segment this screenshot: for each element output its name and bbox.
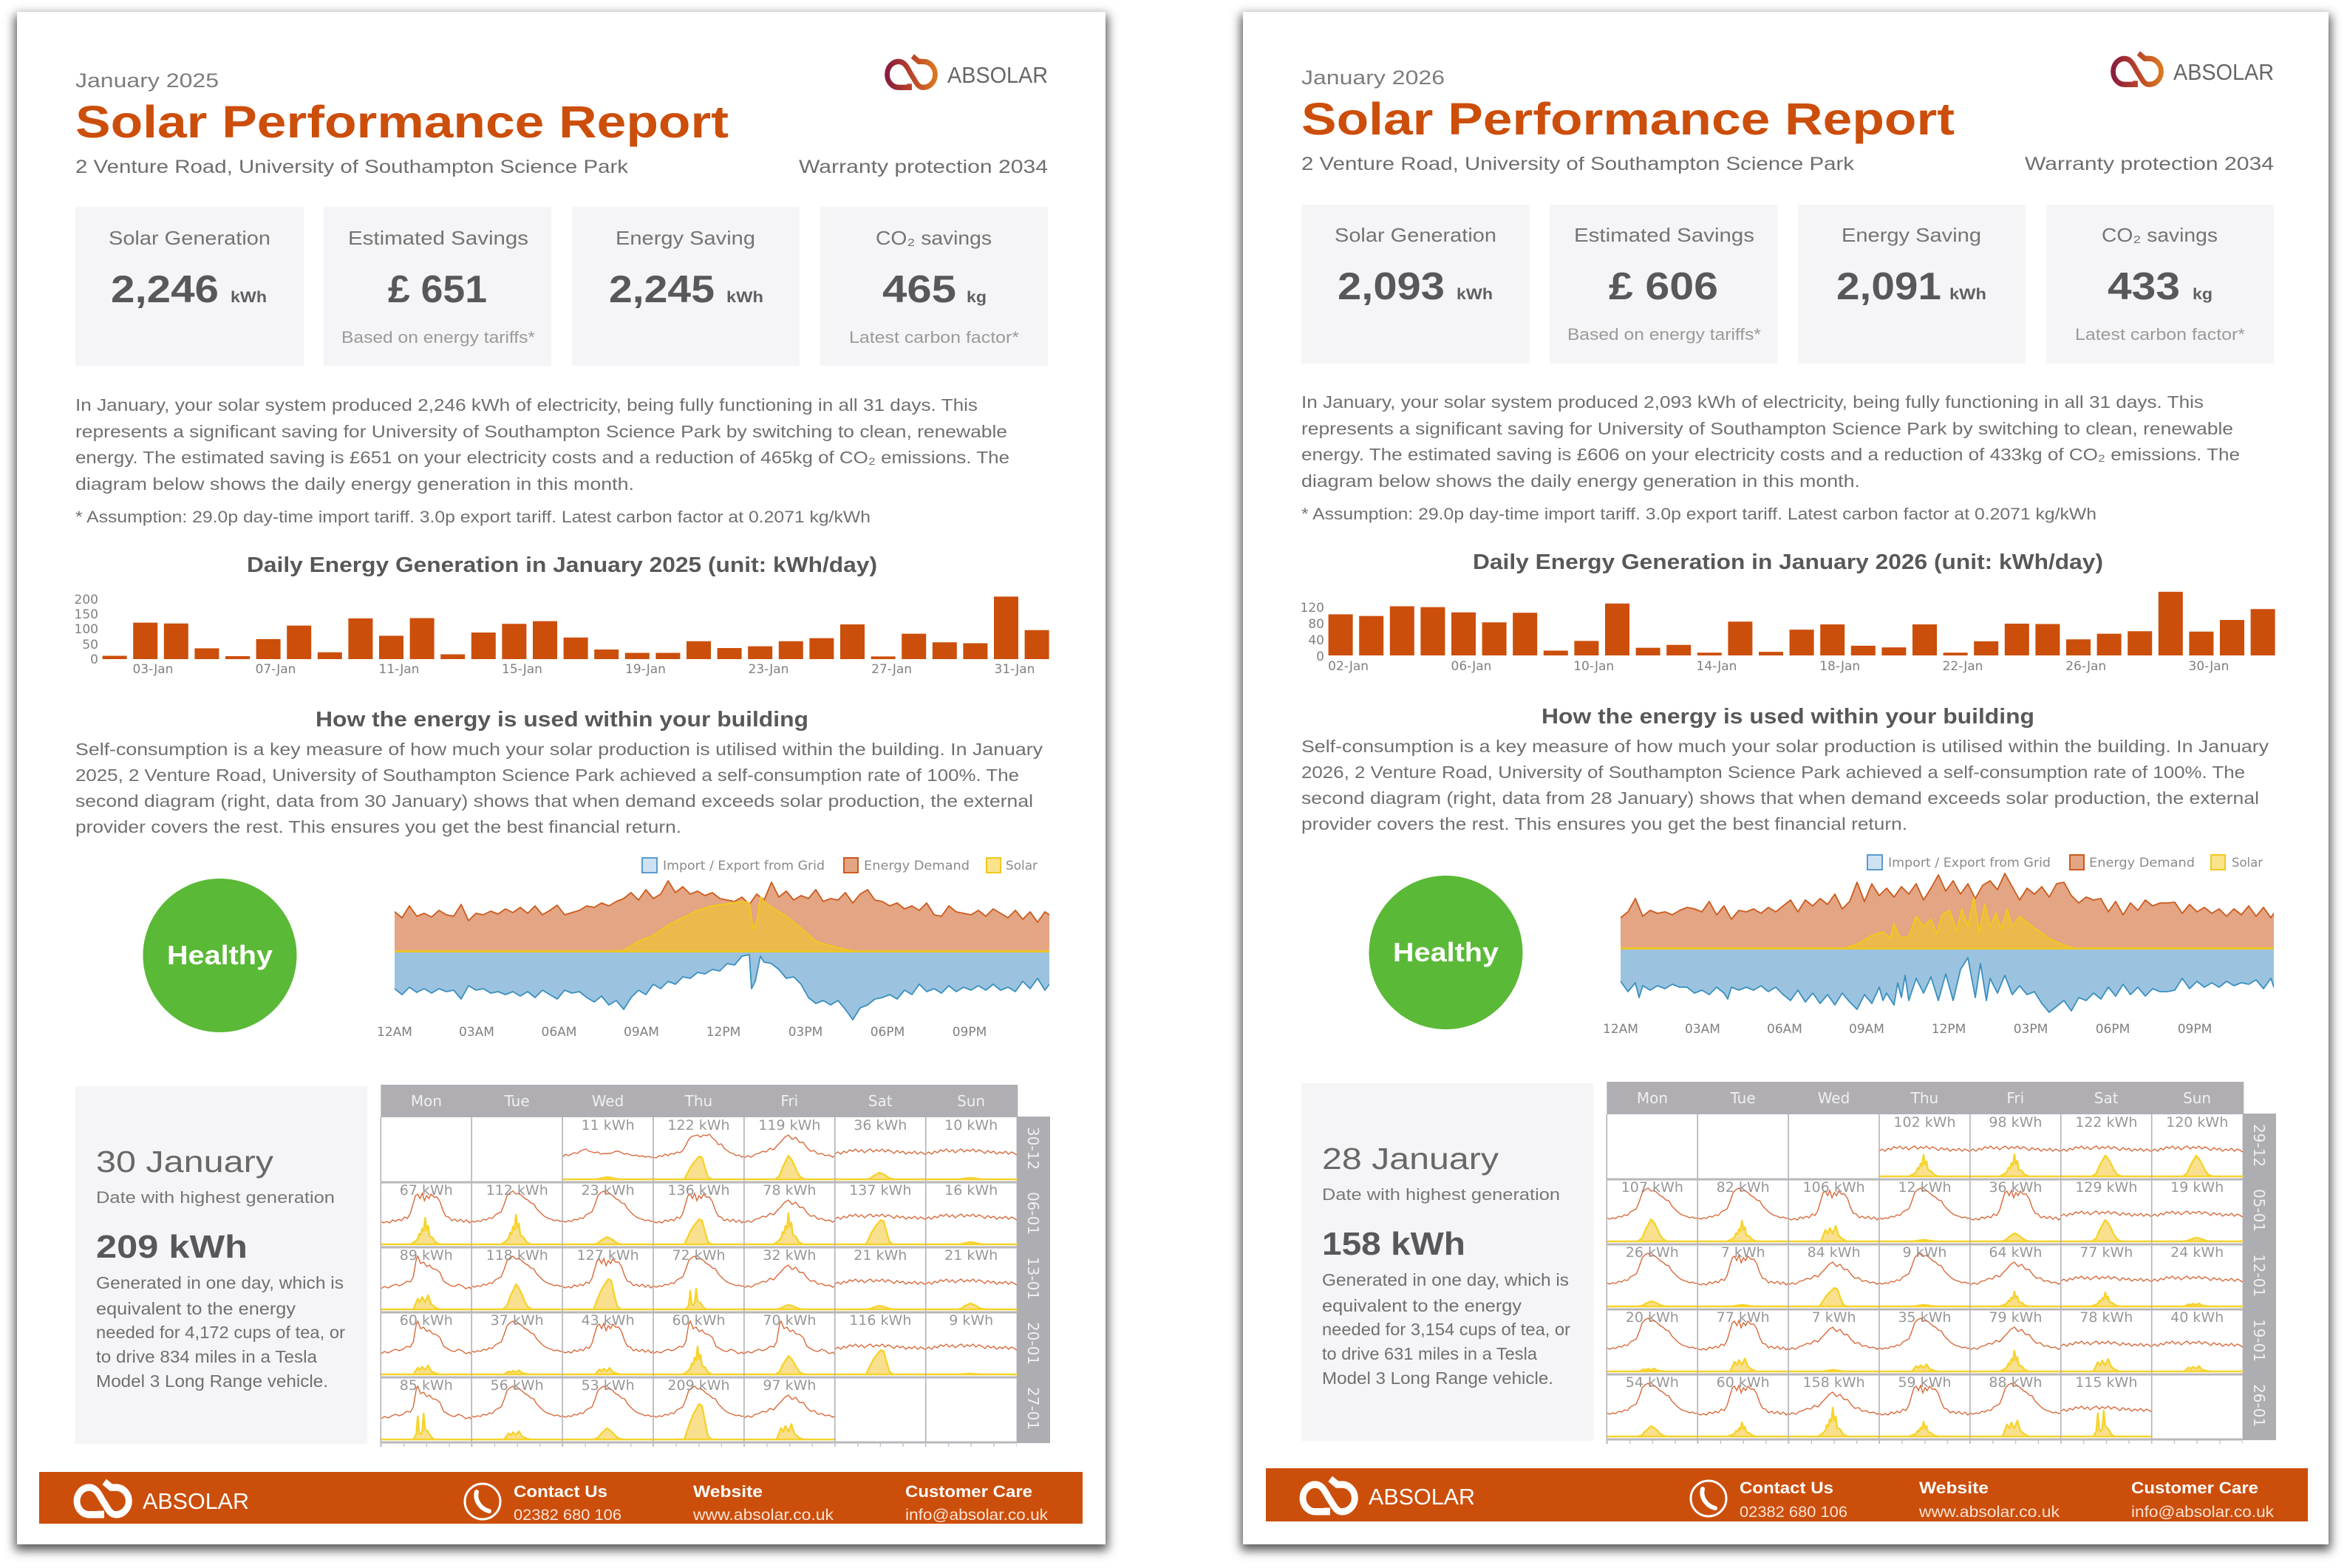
calendar row: week of 19-01: 79 kWh xyxy=(1989,1309,2042,1326)
bar chart: daily generation: 0 xyxy=(90,652,98,667)
calendar row: week of 13-01: 72 kWh xyxy=(672,1247,726,1264)
bar chart: daily generation: 200 xyxy=(75,593,98,607)
summary paragraph: In January, your solar system produced 2,093 kWh of electricity, being fully functioning in all 31 days. This xyxy=(1301,392,2204,412)
panel: date with highest generation: 28 January xyxy=(1322,1142,1499,1176)
calendar row: week of 27-01: 209 kWh xyxy=(667,1377,730,1394)
calendar row: week of 26-01: 60 kWh xyxy=(1717,1374,1770,1391)
address: 2 Venture Road, University of Southampton Science Park xyxy=(1301,154,1855,174)
calendar header: weekdays: Wed xyxy=(1818,1089,1850,1107)
KPI card: estimated savings: Based on energy tariffs* xyxy=(341,328,535,347)
self-consumption paragraph xyxy=(75,740,1043,836)
panel: date with highest generation: Model 3 Long Range vehicle. xyxy=(1322,1368,1553,1388)
calendar header: weekdays: Tue xyxy=(1730,1089,1756,1107)
calendar row: week of 20-01: 60 kWh xyxy=(400,1312,453,1329)
KPI card: energy saving xyxy=(572,207,800,366)
calendar row: week of 29-12: 102 kWh xyxy=(1893,1114,1956,1131)
calendar row: week of 30-12: 10 kWh xyxy=(944,1117,998,1134)
calendar row: week of 06-01: 23 kWh xyxy=(582,1182,635,1199)
footer customer care: info@absolar.co.uk xyxy=(2131,1504,2275,1521)
bar chart: daily generation: 22-Jan xyxy=(1943,659,1983,674)
calendar row: week of 13-01: 21 kWh xyxy=(854,1247,907,1264)
KPI card: estimated savings xyxy=(1550,205,1777,364)
KPI card: CO2 savings: kg xyxy=(967,289,987,306)
footer logo: ABSOLAR xyxy=(143,1488,249,1514)
footer customer care: info@absolar.co.uk xyxy=(905,1507,1049,1524)
summary paragraph: energy. The estimated saving is £606 on your electricity costs and a reduction of 433kg of CO₂ emissions. The xyxy=(1301,445,2240,464)
status badge: Healthy xyxy=(143,879,297,1032)
self-consumption paragraph: provider covers the rest. This ensures you get the best financial return. xyxy=(1301,814,1907,834)
self-consumption paragraph: second diagram (right, data from 28 January) shows that when demand exceeds solar production, the external xyxy=(1301,788,2259,808)
bar chart: daily generation: 02-Jan xyxy=(1328,659,1369,674)
KPI card: solar generation: Solar Generation xyxy=(109,227,270,249)
panel: date with highest generation: needed for 4,172 cups of tea, or xyxy=(96,1323,345,1342)
calendar row: week of 26-01: 59 kWh xyxy=(1898,1374,1952,1391)
panel: date with highest generation xyxy=(1301,1083,1593,1441)
footer bar xyxy=(39,1472,1083,1524)
footer contact: 02382 680 106 xyxy=(514,1507,621,1524)
calendar row: week of 30-12: 122 kWh xyxy=(667,1117,730,1134)
area chart: demand, solar and grid on 28 January: 09AM xyxy=(1849,1022,1884,1037)
bar chart: daily generation: 30-Jan xyxy=(2189,659,2229,674)
status badge: Healthy: Healthy xyxy=(167,940,273,970)
KPI card: energy saving: 2,245 xyxy=(609,268,715,311)
calendar header: weekdays: Fri xyxy=(2006,1089,2024,1107)
calendar: daily demand and solar small multiples xyxy=(381,1085,1050,1447)
calendar row: week of 27-01: 97 kWh xyxy=(763,1377,816,1394)
KPI card: energy saving: 2,091 xyxy=(1836,265,1941,308)
bar chart: daily generation: 26-Jan xyxy=(2065,659,2106,674)
report month: January 2025 xyxy=(75,69,219,92)
bar chart: daily generation: 31-Jan xyxy=(995,662,1035,677)
area chart: demand, solar and grid on 28 January: 09PM xyxy=(2178,1022,2212,1037)
calendar row: week of 06-01 xyxy=(381,1182,1017,1244)
brand logo: ABSOLAR xyxy=(2173,59,2274,85)
calendar row: week of 12-01 xyxy=(1607,1244,2243,1306)
calendar header: weekdays: Wed xyxy=(592,1092,624,1110)
self-consumption paragraph: 2026, 2 Venture Road, University of Southampton Science Park achieved a self-consumption rate of 100%. The xyxy=(1301,763,2245,782)
brand logo xyxy=(2113,53,2274,85)
area chart: demand, solar and grid on 28 January: 03PM xyxy=(2014,1022,2048,1037)
summary paragraph xyxy=(1301,392,2240,491)
footer contact: Contact Us xyxy=(514,1482,607,1501)
KPI card: CO2 savings: 433 xyxy=(2108,265,2180,308)
calendar row: week of 30-12 xyxy=(562,1117,1017,1179)
footer logo: ABSOLAR xyxy=(1369,1484,1475,1510)
calendar week strip: 27-01 xyxy=(1024,1387,1042,1430)
calendar row: week of 13-01: 21 kWh xyxy=(944,1247,998,1264)
KPI card: solar generation: kWh xyxy=(1457,286,1493,303)
area chart: demand, solar and grid on 28 January: 06AM xyxy=(1767,1022,1802,1037)
bar chart: daily generation: 11-Jan xyxy=(379,662,419,677)
area chart: demand, solar and grid on 30 January: 09PM xyxy=(953,1025,987,1040)
KPI card: energy saving xyxy=(1798,205,2026,364)
footer contact: Contact Us xyxy=(1740,1479,1833,1497)
calendar row: week of 27-01: 56 kWh xyxy=(491,1377,544,1394)
legend xyxy=(642,858,1038,873)
KPI card: estimated savings: £ 651 xyxy=(388,268,487,311)
calendar week strip: 12-01 xyxy=(2250,1254,2268,1297)
self-consumption paragraph: provider covers the rest. This ensures you get the best financial return. xyxy=(75,817,681,836)
calendar row: week of 13-01: 127 kWh xyxy=(577,1247,639,1264)
panel: date with highest generation: 209 kWh xyxy=(96,1229,248,1265)
calendar header: weekdays: Sun xyxy=(2183,1089,2211,1107)
self-consumption heading: How the energy is used within your building xyxy=(316,708,808,732)
self-consumption paragraph xyxy=(1301,737,2269,834)
panel: date with highest generation: to drive 631 miles in a Tesla xyxy=(1322,1344,1537,1363)
calendar row: week of 26-01: 115 kWh xyxy=(2075,1374,2137,1391)
legend: Solar xyxy=(1006,859,1038,873)
calendar row: week of 06-01: 137 kWh xyxy=(849,1182,911,1199)
calendar row: week of 13-01: 118 kWh xyxy=(486,1247,548,1264)
area chart: demand, solar and grid on 30 January: 03PM xyxy=(788,1025,822,1040)
calendar row: week of 19-01: 20 kWh xyxy=(1626,1309,1679,1326)
calendar row: week of 06-01: 16 kWh xyxy=(944,1182,998,1199)
calendar row: week of 27-01 xyxy=(381,1377,835,1439)
footer logo xyxy=(77,1482,249,1515)
footer website: www.absolar.co.uk xyxy=(692,1507,834,1524)
area chart: demand, solar and grid on 30 January: 03AM xyxy=(459,1025,494,1040)
summary paragraph: energy. The estimated saving is £651 on your electricity costs and a reduction of 465kg of CO₂ emissions. The xyxy=(75,448,1009,467)
warranty note: Warranty protection 2034 xyxy=(2025,154,2274,174)
calendar row: week of 05-01: 106 kWh xyxy=(1803,1179,1865,1196)
calendar row: week of 13-01: 89 kWh xyxy=(400,1247,453,1264)
calendar row: week of 19-01: 35 kWh xyxy=(1898,1309,1952,1326)
KPI card: estimated savings: £ 606 xyxy=(1609,265,1718,308)
icon: phone xyxy=(1691,1481,1726,1516)
KPI card: CO2 savings: 465 xyxy=(882,268,956,311)
summary paragraph xyxy=(75,395,1009,494)
bar chart: daily generation: 0 xyxy=(1316,650,1324,664)
bar chart: daily generation: 10-Jan xyxy=(1573,659,1614,674)
panel: date with highest generation: Model 3 Long Range vehicle. xyxy=(96,1371,328,1391)
KPI card: CO2 savings: Latest carbon factor* xyxy=(2075,325,2245,344)
calendar week strip: 19-01 xyxy=(2250,1319,2268,1362)
KPI card: energy saving: Energy Saving xyxy=(616,227,755,249)
footer customer care: Customer Care xyxy=(2131,1479,2258,1497)
bar chart: daily generation: 07-Jan xyxy=(256,662,296,677)
bar chart: daily generation: 23-Jan xyxy=(749,662,788,677)
brand logo: ABSOLAR xyxy=(947,62,1048,88)
calendar row: week of 12-01: 26 kWh xyxy=(1626,1244,1679,1261)
panel: date with highest generation: Date with highest generation xyxy=(1322,1185,1560,1204)
calendar row: week of 19-01: 7 kWh xyxy=(1812,1309,1856,1326)
footer website: www.absolar.co.uk xyxy=(1918,1504,2060,1521)
calendar row: week of 12-01: 64 kWh xyxy=(1989,1244,2042,1261)
title: Solar Performance Report xyxy=(1301,94,1955,144)
calendar row: week of 12-01: 7 kWh xyxy=(1721,1244,1765,1261)
calendar week strip: 05-01 xyxy=(2250,1189,2268,1232)
calendar row: week of 26-01: 88 kWh xyxy=(1989,1374,2042,1391)
area chart: demand, solar and grid on 30 January: 09AM xyxy=(624,1025,659,1040)
footer customer care: Customer Care xyxy=(905,1482,1032,1501)
KPI card: solar generation: kWh xyxy=(231,289,267,306)
panel: date with highest generation: Generated in one day, which is xyxy=(1322,1270,1569,1289)
calendar header: weekdays: Fri xyxy=(780,1092,798,1110)
KPI card: solar generation: 2,093 xyxy=(1338,265,1445,308)
calendar row: week of 30-12: 119 kWh xyxy=(758,1117,820,1134)
calendar row: week of 26-01: 54 kWh xyxy=(1626,1374,1679,1391)
calendar header: weekdays: Sat xyxy=(2094,1089,2119,1107)
self-consumption paragraph: 2025, 2 Venture Road, University of Southampton Science Park achieved a self-consumption rate of 100%. The xyxy=(75,766,1019,785)
calendar header: weekdays: Sun xyxy=(957,1092,985,1110)
self-consumption paragraph: Self-consumption is a key measure of how much your solar production is utilised within the building. In January xyxy=(1301,737,2269,756)
calendar row: week of 27-01: 85 kWh xyxy=(400,1377,453,1394)
footer contact xyxy=(1740,1479,1847,1521)
area chart: demand, solar and grid on 30 January: 12PM xyxy=(706,1025,740,1040)
KPI card: estimated savings: Estimated Savings xyxy=(348,227,528,249)
calendar row: week of 29-12: 122 kWh xyxy=(2075,1114,2137,1131)
calendar week strip: 06-01 xyxy=(1024,1192,1042,1235)
calendar header: weekdays: Tue xyxy=(504,1092,530,1110)
legend: Energy Demand xyxy=(2089,856,2195,870)
calendar row: week of 20-01: 37 kWh xyxy=(491,1312,544,1329)
panel: date with highest generation: 158 kWh xyxy=(1322,1226,1465,1262)
calendar row: week of 20-01: 70 kWh xyxy=(763,1312,816,1329)
legend: Import / Export from Grid xyxy=(663,859,825,873)
bar chart: daily generation: 100 xyxy=(75,622,98,637)
panel: date with highest generation: Date with highest generation xyxy=(96,1188,335,1207)
summary paragraph: represents a significant saving for University of Southampton Science Park by switching to clean, renewable xyxy=(1301,419,2233,438)
KPI card: estimated savings xyxy=(324,207,551,366)
calendar row: week of 06-01: 136 kWh xyxy=(667,1182,730,1199)
area chart: demand, solar and grid on 28 January: 12AM xyxy=(1603,1022,1638,1037)
bar chart: daily generation: 50 xyxy=(82,638,98,652)
status badge: Healthy xyxy=(1369,876,1522,1029)
KPI card: energy saving: kWh xyxy=(1949,286,1986,303)
legend: Solar xyxy=(2232,856,2263,870)
page background: January 2026 xyxy=(1243,12,2329,1544)
calendar row: week of 26-01: 158 kWh xyxy=(1803,1374,1865,1391)
calendar header: weekdays: Mon xyxy=(1637,1089,1668,1107)
calendar header: weekdays xyxy=(381,1085,1018,1117)
footer website xyxy=(692,1482,834,1524)
bar chart: daily generation: 150 xyxy=(75,607,98,622)
bar chart: daily generation: 27-Jan xyxy=(871,662,912,677)
calendar row: week of 06-01: 78 kWh xyxy=(763,1182,816,1199)
panel: date with highest generation: needed for 3,154 cups of tea, or xyxy=(1322,1320,1570,1339)
page shadow: January 2025 xyxy=(15,15,1108,1550)
legend xyxy=(1867,855,2263,870)
page shadow: January 2026 xyxy=(1241,15,2331,1550)
area chart: demand, solar and grid on 28 January xyxy=(1603,873,2286,1037)
calendar week strip: 13-01 xyxy=(1024,1257,1042,1300)
KPI card: CO2 savings: CO₂ savings xyxy=(2102,224,2218,246)
KPI card: CO2 savings: kg xyxy=(2193,286,2213,303)
KPI card: CO2 savings xyxy=(2046,205,2274,364)
KPI card: estimated savings: Based on energy tariffs* xyxy=(1567,325,1761,344)
calendar row: week of 30-12: 11 kWh xyxy=(582,1117,635,1134)
area chart: demand, solar and grid on 30 January: 06AM xyxy=(542,1025,576,1040)
area chart: demand, solar and grid on 30 January xyxy=(377,881,1060,1040)
calendar: daily demand and solar small multiples xyxy=(1607,1082,2276,1444)
calendar row: week of 19-01: 77 kWh xyxy=(1717,1309,1770,1326)
footer website: Website xyxy=(1919,1479,1989,1497)
calendar row: week of 12-01: 84 kWh xyxy=(1808,1244,1861,1261)
title: Solar Performance Report xyxy=(75,97,729,147)
KPI card: solar generation xyxy=(75,207,304,366)
calendar week strip: 30-12 xyxy=(1024,1127,1042,1170)
warranty note: Warranty protection 2034 xyxy=(799,157,1048,177)
area chart: demand, solar and grid on 28 January: 06PM xyxy=(2096,1022,2130,1037)
footer contact xyxy=(514,1482,621,1524)
footer website: Website xyxy=(693,1482,763,1501)
brand logo xyxy=(888,56,1048,88)
self-consumption paragraph: second diagram (right, data from 30 January) shows that when demand exceeds solar production, the external xyxy=(75,791,1033,811)
legend: Energy Demand xyxy=(864,859,970,873)
calendar row: week of 29-12 xyxy=(1879,1114,2243,1176)
status badge: Healthy: Healthy xyxy=(1393,937,1499,967)
panel: date with highest generation: Generated in one day, which is xyxy=(96,1273,344,1292)
bar chart: daily generation: 19-Jan xyxy=(625,662,666,677)
bar chart heading: Daily Energy Generation in January 2025 (unit: kWh/day) xyxy=(247,553,877,577)
calendar row: week of 05-01: 82 kWh xyxy=(1717,1179,1770,1196)
bar chart: daily generation: 80 xyxy=(1308,617,1324,632)
KPI card: energy saving: Energy Saving xyxy=(1842,224,1981,246)
footer contact: 02382 680 106 xyxy=(1740,1504,1847,1521)
calendar row: week of 20-01: 9 kWh xyxy=(949,1312,993,1329)
bar chart: daily generation: 18-Jan xyxy=(1819,659,1860,674)
calendar row: week of 19-01 xyxy=(1607,1309,2243,1371)
panel: date with highest generation xyxy=(75,1086,367,1444)
calendar week strip xyxy=(2243,1114,2276,1440)
calendar row: week of 06-01: 67 kWh xyxy=(400,1182,453,1199)
panel: date with highest generation: 30 January xyxy=(96,1145,274,1179)
calendar row: week of 29-12: 98 kWh xyxy=(1989,1114,2042,1131)
bar chart: daily generation: 03-Jan xyxy=(133,662,173,677)
calendar header: weekdays xyxy=(1607,1082,2244,1114)
calendar header: weekdays: Thu xyxy=(684,1092,712,1110)
area chart: demand, solar and grid on 28 January: 03AM xyxy=(1685,1022,1720,1037)
icon: phone xyxy=(465,1484,500,1519)
calendar row: week of 19-01: 40 kWh xyxy=(2170,1309,2224,1326)
calendar row: week of 20-01 xyxy=(381,1312,1017,1374)
KPI card: solar generation xyxy=(1301,205,1530,364)
calendar row: week of 05-01: 19 kWh xyxy=(2170,1179,2224,1196)
self-consumption paragraph: Self-consumption is a key measure of how much your solar production is utilised within the building. In January xyxy=(75,740,1043,759)
panel: date with highest generation: equivalent to the energy xyxy=(1322,1296,1522,1315)
area chart: demand, solar and grid on 30 January: 12AM xyxy=(377,1025,412,1040)
calendar row: week of 13-01 xyxy=(381,1247,1017,1309)
summary paragraph: diagram below shows the daily energy generation in this month. xyxy=(1301,471,1860,491)
legend: Import / Export from Grid xyxy=(1888,856,2051,870)
calendar week strip: 20-01 xyxy=(1024,1322,1042,1365)
page background: January 2025 xyxy=(17,12,1106,1544)
calendar row: week of 20-01: 60 kWh xyxy=(672,1312,726,1329)
calendar row: week of 05-01: 107 kWh xyxy=(1621,1179,1683,1196)
footer bar xyxy=(1266,1468,2308,1521)
calendar row: week of 20-01: 116 kWh xyxy=(849,1312,911,1329)
bar chart: daily generation: 14-Jan xyxy=(1697,659,1737,674)
KPI card: solar generation: 2,246 xyxy=(111,268,219,311)
assumption footnote: * Assumption: 29.0p day-time import tariff. 3.0p export tariff. Latest carbon factor at 0.2071 kg/kWh xyxy=(75,508,871,526)
calendar row: week of 05-01 xyxy=(1607,1179,2243,1241)
calendar row: week of 29-12: 120 kWh xyxy=(2166,1114,2228,1131)
calendar week strip: 29-12 xyxy=(2250,1124,2268,1167)
calendar header: weekdays: Mon xyxy=(411,1092,442,1110)
calendar row: week of 12-01: 24 kWh xyxy=(2170,1244,2224,1261)
calendar header: weekdays: Sat xyxy=(868,1092,893,1110)
report page: January 2025 xyxy=(39,56,1083,1524)
calendar row: week of 13-01: 32 kWh xyxy=(763,1247,816,1264)
calendar header: weekdays: Thu xyxy=(1910,1089,1938,1107)
summary paragraph: represents a significant saving for University of Southampton Science Park by switching to clean, renewable xyxy=(75,422,1007,441)
area chart: demand, solar and grid on 30 January: 06PM xyxy=(871,1025,905,1040)
bar chart: daily generation: 15-Jan xyxy=(502,662,542,677)
calendar row: week of 27-01: 53 kWh xyxy=(582,1377,635,1394)
calendar row: week of 05-01: 36 kWh xyxy=(1989,1179,2042,1196)
KPI card: CO2 savings: CO₂ savings xyxy=(876,227,992,249)
bar chart: daily generation: 40 xyxy=(1308,633,1324,648)
calendar row: week of 06-01: 112 kWh xyxy=(486,1182,548,1199)
KPI card: CO2 savings xyxy=(820,207,1048,366)
bar chart: daily generation: 120 xyxy=(1301,601,1324,616)
calendar row: week of 20-01: 43 kWh xyxy=(582,1312,635,1329)
footer logo xyxy=(1303,1479,1475,1512)
summary paragraph: In January, your solar system produced 2,246 kWh of electricity, being fully functioning in all 31 days. This xyxy=(75,395,978,415)
KPI card: estimated savings: Estimated Savings xyxy=(1574,224,1754,246)
report page: January 2026 xyxy=(1266,53,2308,1521)
KPI card: solar generation: Solar Generation xyxy=(1335,224,1496,246)
calendar week strip: 26-01 xyxy=(2250,1384,2268,1427)
assumption footnote: * Assumption: 29.0p day-time import tariff. 3.0p export tariff. Latest carbon factor at 0.2071 kg/kWh xyxy=(1301,505,2096,523)
KPI card: CO2 savings: Latest carbon factor* xyxy=(849,328,1019,347)
footer website xyxy=(1918,1479,2060,1521)
bar chart: daily generation xyxy=(1301,592,2275,674)
area chart: demand, solar and grid on 28 January: 12PM xyxy=(1932,1022,1966,1037)
calendar row: week of 12-01: 77 kWh xyxy=(2079,1244,2133,1261)
bar chart heading: Daily Energy Generation in January 2026 (unit: kWh/day) xyxy=(1473,550,2103,574)
KPI card: energy saving: kWh xyxy=(726,289,763,306)
calendar row: week of 19-01: 78 kWh xyxy=(2079,1309,2133,1326)
bar chart: daily generation xyxy=(75,593,1049,677)
calendar row: week of 30-12: 36 kWh xyxy=(854,1117,907,1134)
panel: date with highest generation: to drive 834 miles in a Tesla xyxy=(96,1347,317,1366)
panel: date with highest generation: equivalent to the energy xyxy=(96,1299,296,1318)
calendar row: week of 12-01: 9 kWh xyxy=(1903,1244,1946,1261)
self-consumption heading: How the energy is used within your building xyxy=(1542,705,2034,729)
calendar week strip xyxy=(1017,1117,1050,1443)
bar chart: daily generation: 06-Jan xyxy=(1451,659,1491,674)
summary paragraph: diagram below shows the daily energy generation in this month. xyxy=(75,474,634,494)
report month: January 2026 xyxy=(1301,67,1445,89)
calendar row: week of 26-01 xyxy=(1607,1374,2152,1436)
calendar row: week of 05-01: 12 kWh xyxy=(1898,1179,1952,1196)
calendar row: week of 05-01: 129 kWh xyxy=(2075,1179,2137,1196)
footer customer care xyxy=(905,1482,1049,1524)
address: 2 Venture Road, University of Southampton Science Park xyxy=(75,157,629,177)
footer customer care xyxy=(2131,1479,2275,1521)
